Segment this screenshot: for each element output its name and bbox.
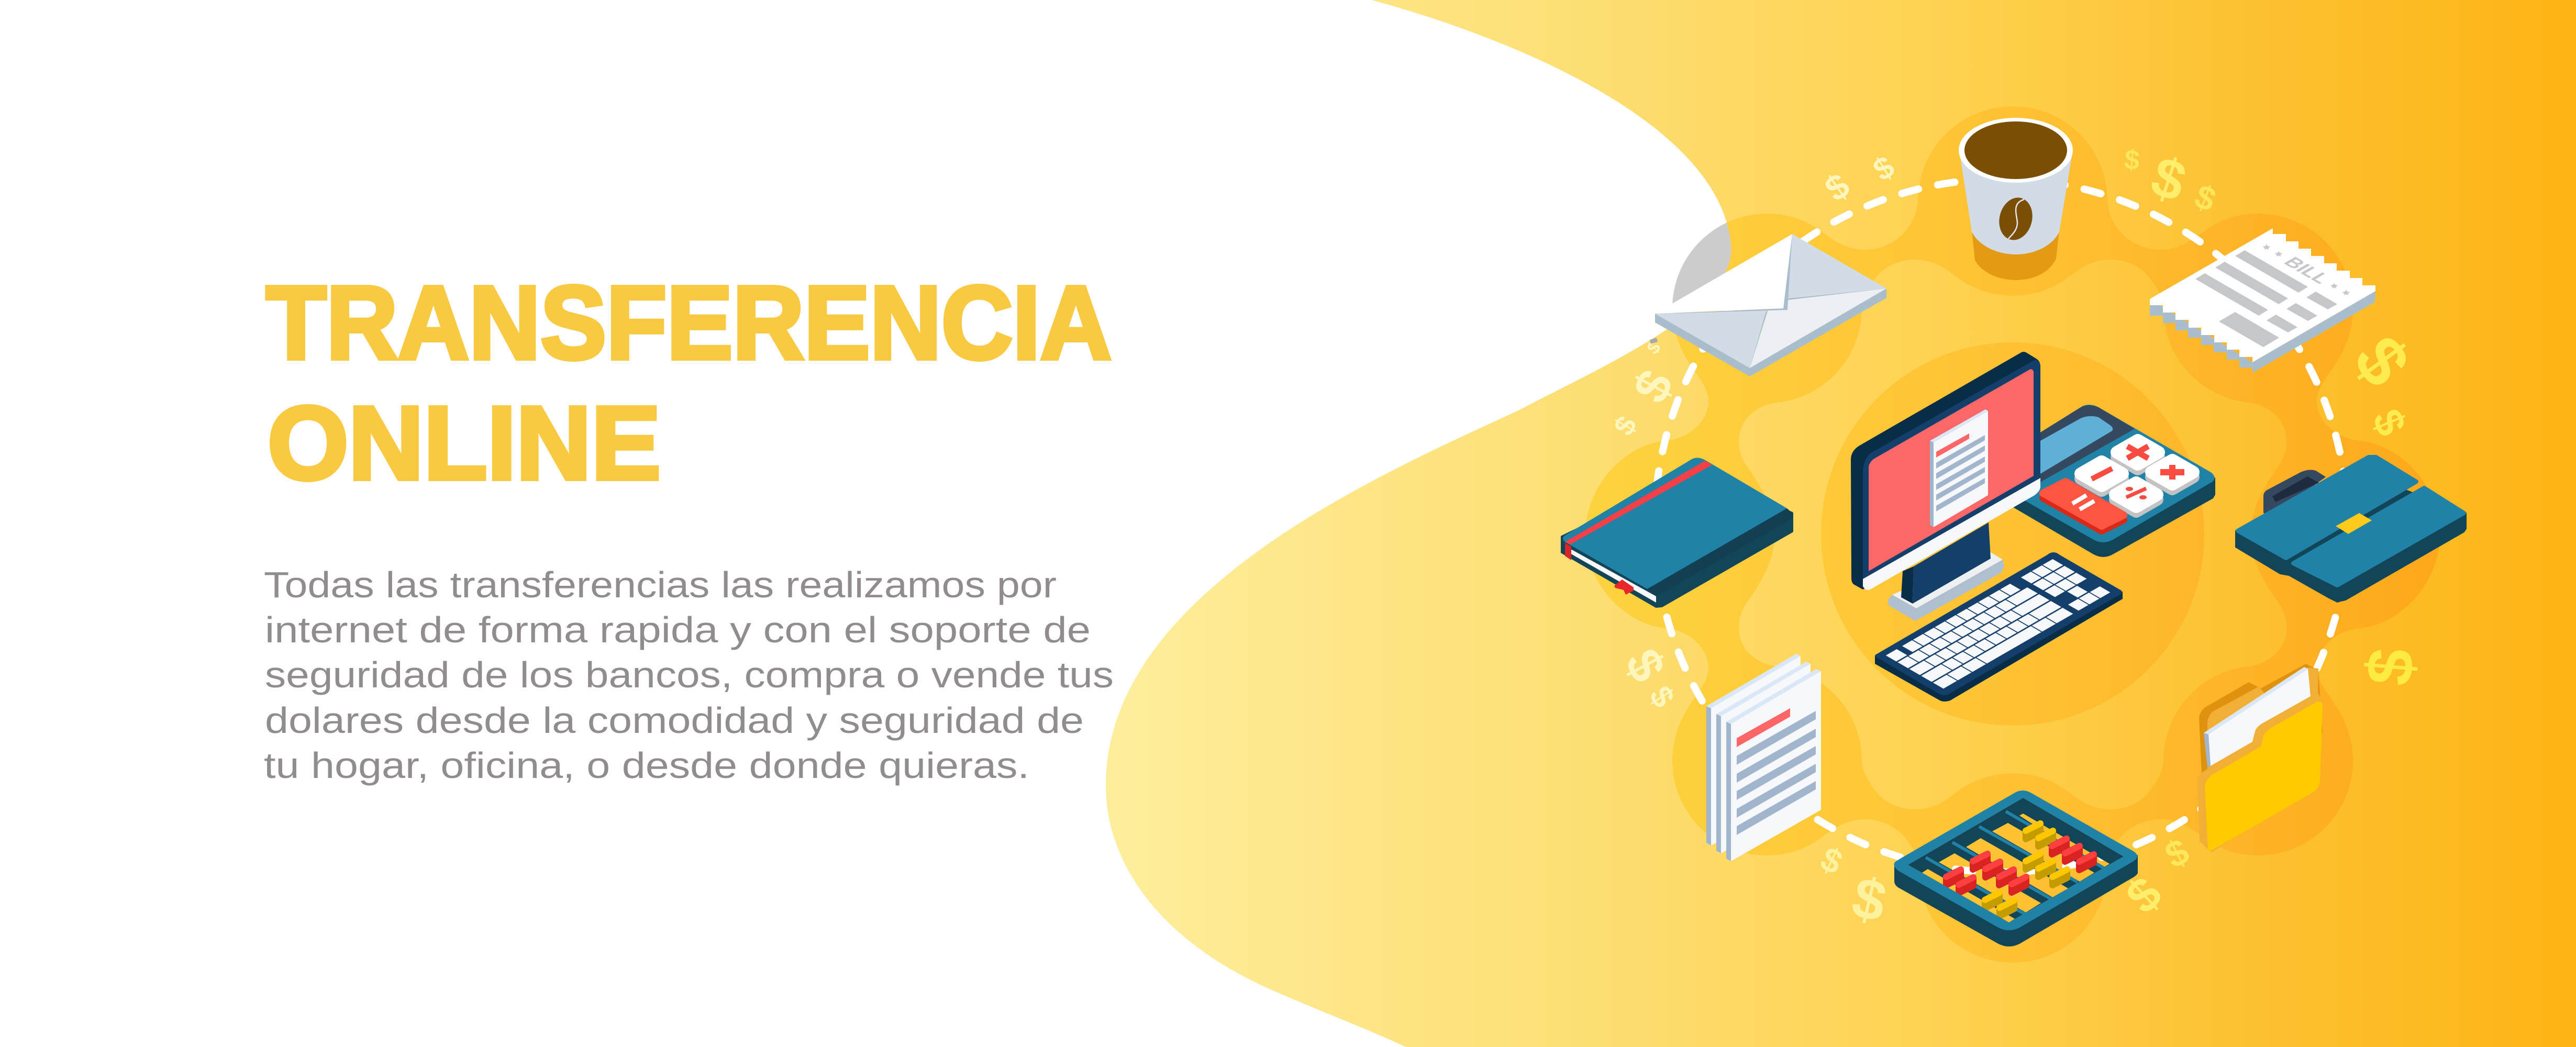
title [266,265,1112,502]
monitor back edge [1851,352,2040,589]
dollar signs: left side [1607,149,1901,934]
body paragraph: Todas las transferencias las realizamos por [264,564,1057,605]
dashed white ring connecting icons [1655,179,2348,872]
body paragraph: seguridad de los bancos, compra o vende tus [265,654,1114,695]
icon: bill receipt: BILL [2279,254,2335,286]
dollar signs: left side: $ [1623,361,1684,411]
monitor base [1888,552,2004,621]
icon: paper document stack [1706,654,1821,861]
icon: briefcase [2236,457,2466,602]
icon: abacus [1894,790,2138,946]
dollar signs: left side: $ [1607,410,1643,441]
icon: envelope [1655,234,1886,376]
dollar signs: right side: $ [2123,144,2141,176]
center blob circle [1821,342,2204,726]
icon: desktop monitor [1851,352,2040,621]
monitor chin [1863,478,2040,590]
dollar signs: left side: $ [1815,839,1848,882]
dollar signs: right side [2116,144,2428,924]
monitor frame [1863,360,2040,580]
icon: folder [2197,664,2323,852]
dollar signs: right side: $ [2159,830,2195,876]
title: ONLINE [268,385,661,502]
icon: notebook [1562,458,1792,607]
icon: keyboard [1875,552,2123,701]
body paragraph: internet de forma rapida y con el soporte de [265,609,1091,650]
dollar signs: left side: $ [1642,680,1682,714]
dollar signs: right side: $ [2116,866,2172,924]
dollar signs: left side: $ [1614,640,1676,690]
dollar signs: right side: $ [2363,403,2415,442]
blob ring behind icons [1585,106,2440,963]
icon: bill receipt [2150,228,2375,373]
monitor stand [1901,522,1991,604]
dollar signs: left side: $ [1867,149,1901,188]
dollar signs: right side: $ [2190,177,2221,219]
icon: calculator [2013,405,2215,557]
dollar signs: left side: $ [1818,165,1857,209]
dollar signs: right side: $ [2352,645,2428,688]
dollar signs: right side: $ [2338,322,2426,400]
document on screen [1930,409,1988,527]
title: TRANSFERENCIA [266,265,1112,381]
white wave panel [0,0,1731,1047]
dollar signs: left side: $ [1643,338,1664,358]
dollar signs: left side: $ [1846,865,1892,934]
body paragraph: dolares desde la comodidad y seguridad de [265,700,1084,741]
grey circle segment behind envelope [1672,222,1731,313]
body paragraph [264,564,1114,786]
dollar signs: right side: $ [2144,144,2193,214]
icon: coffee cup [1959,118,2073,280]
small grey dollar fragment on white [1650,340,1657,342]
body paragraph: tu hogar, oficina, o desde donde quieras. [264,745,1029,786]
monitor screen [1869,369,2034,571]
